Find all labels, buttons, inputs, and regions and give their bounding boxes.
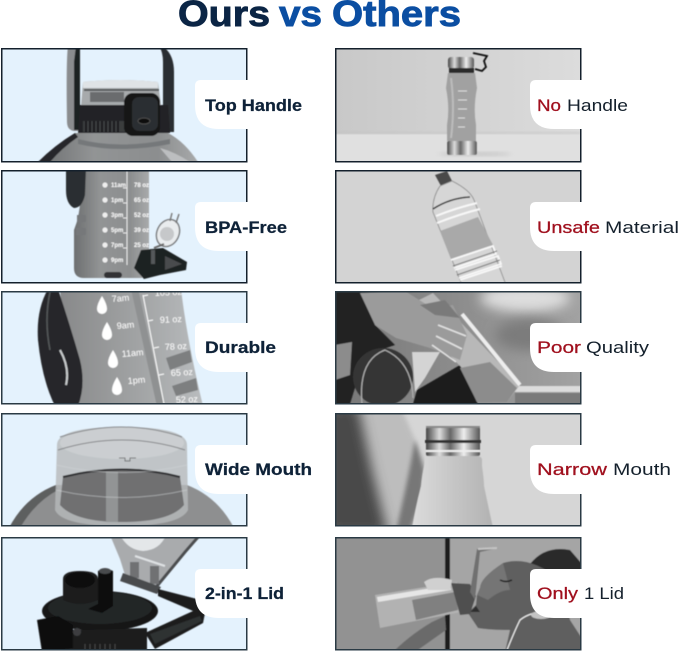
image: bottle close-up with time markers: 11am bbox=[121, 347, 144, 359]
label: unsafe material: Material bbox=[605, 218, 679, 237]
image: bottle close-up with time markers bbox=[38, 287, 203, 406]
image: bottle and open lid: 3pm bbox=[111, 213, 123, 219]
panel: others no handle bbox=[335, 48, 628, 163]
image: bottle and open lid: 52 oz bbox=[134, 213, 149, 219]
panel: others only 1 lid bbox=[335, 537, 624, 652]
image: bottle and open lid: 7pm bbox=[111, 243, 123, 249]
panel: ours wide mouth bbox=[1, 413, 312, 528]
image: bottle close-up with time markers: 78 oz bbox=[165, 341, 188, 352]
panel: ours 2-in-1 lid bbox=[1, 535, 284, 652]
label: no handle bbox=[537, 96, 628, 115]
label: narrow mouth bbox=[537, 460, 671, 479]
label: only 1 lid bbox=[537, 584, 624, 603]
label tab bbox=[530, 323, 584, 372]
image: tilted disposable plastic bottle bbox=[433, 171, 506, 285]
image: wide bottle neck bbox=[9, 427, 234, 528]
image: bottle close-up with time markers: 7am bbox=[111, 293, 130, 304]
image: open two-in-one lid bbox=[37, 535, 205, 652]
label: unsafe material: Unsafe bbox=[537, 218, 600, 237]
image: person holding a bottle bbox=[336, 292, 580, 403]
label tab bbox=[195, 445, 250, 494]
label tab bbox=[530, 80, 584, 129]
image: bottle close-up with time markers: 65 oz bbox=[171, 367, 194, 378]
image: bottle and open lid: 25 oz bbox=[134, 243, 149, 249]
label: BPA-free: BPA-Free bbox=[205, 218, 287, 237]
label: narrow mouth: Mouth bbox=[613, 460, 671, 479]
label tab bbox=[530, 569, 584, 618]
label tab bbox=[195, 323, 250, 372]
panel: others unsafe material bbox=[335, 170, 679, 285]
label: poor quality bbox=[537, 338, 650, 357]
panel: ours BPA-free bbox=[1, 168, 287, 283]
label tab bbox=[195, 80, 250, 129]
label: narrow mouth: Narrow bbox=[537, 460, 608, 479]
image: bottle and open lid: 11am bbox=[111, 183, 126, 189]
image: bottle close-up with time markers: 105 oz bbox=[155, 287, 183, 298]
label: no handle: No bbox=[537, 96, 561, 115]
image: bottle close-up with time markers: 1pm bbox=[127, 375, 146, 386]
image: bottle close-up with time markers: 52 oz bbox=[176, 394, 199, 405]
label: only 1 lid: 1 Lid bbox=[584, 584, 624, 603]
label: durable: Durable bbox=[205, 338, 276, 357]
label: unsafe material bbox=[537, 218, 679, 237]
image: bottle and open lid: 65 oz bbox=[134, 198, 149, 204]
image: bottle and open lid: 1pm bbox=[111, 198, 123, 204]
panel: ours durable bbox=[1, 287, 276, 406]
image: bottle and open lid bbox=[66, 168, 187, 279]
image: bottle and open lid: 5pm bbox=[111, 228, 123, 234]
label tab bbox=[530, 445, 584, 494]
panel: others poor quality bbox=[335, 284, 650, 406]
image: woman drinking from a bottle bbox=[335, 537, 583, 652]
image: bottle and open lid: 78 oz bbox=[134, 183, 149, 189]
image: slim bottle on a table bbox=[335, 53, 581, 163]
label: 2-in-1 lid: 2-in-1 Lid bbox=[205, 584, 284, 603]
panel: ours top handle bbox=[1, 46, 302, 162]
label: poor quality: Poor bbox=[537, 338, 581, 357]
title bbox=[178, 0, 461, 34]
label: wide mouth: Wide Mouth bbox=[205, 460, 312, 479]
label: no handle: Handle bbox=[567, 96, 628, 115]
image: bottle close-up with time markers: 91 oz bbox=[160, 314, 183, 325]
panel: others narrow mouth bbox=[335, 413, 670, 526]
label tab bbox=[530, 202, 584, 251]
image: bottle and open lid: 39 oz bbox=[134, 228, 149, 234]
label tab bbox=[195, 202, 250, 251]
label: only 1 lid: Only bbox=[537, 584, 579, 603]
label tab bbox=[195, 569, 250, 618]
image: bottle close-up with time markers: 9am bbox=[116, 320, 135, 331]
image: bottle top with handle bbox=[38, 46, 198, 162]
label: poor quality: Quality bbox=[586, 338, 650, 357]
label: top handle: Top Handle bbox=[205, 96, 302, 115]
image: steel-neck bottle bbox=[336, 414, 493, 525]
image: bottle and open lid: 9pm bbox=[111, 258, 123, 264]
